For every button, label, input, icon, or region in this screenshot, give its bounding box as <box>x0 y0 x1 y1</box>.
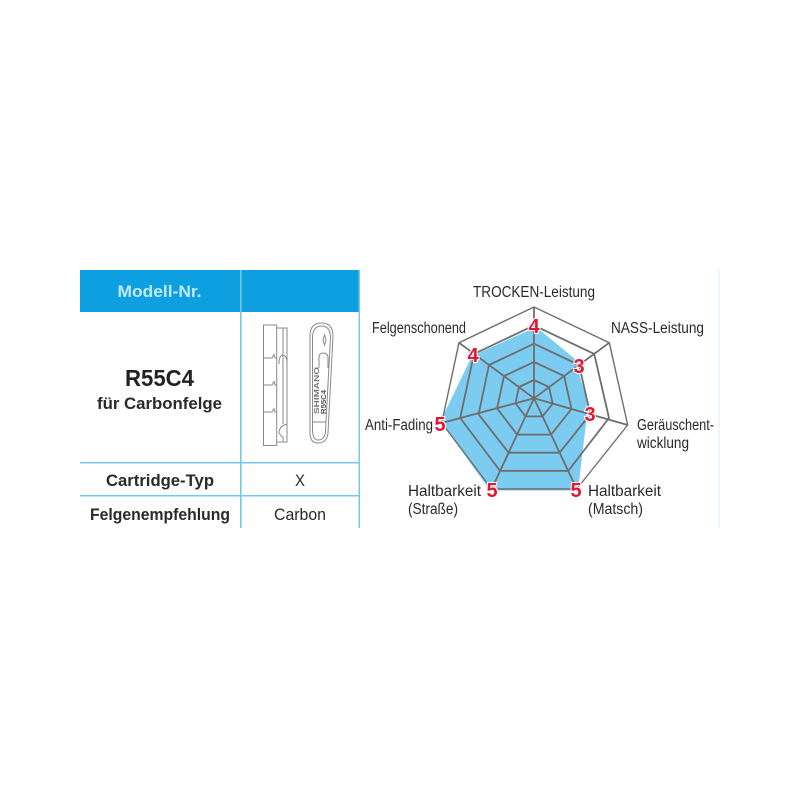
model name: R55C4 <box>125 365 194 391</box>
score: durability mud: 5 <box>570 480 582 502</box>
row value: rim recommendation: Carbon <box>274 505 326 524</box>
icon: brake pad side view <box>264 325 287 446</box>
label: durability road <box>408 483 482 518</box>
row label: rim recommendation: Felgenempfehlung <box>90 505 230 524</box>
label: durability mud: (Matsch) <box>588 501 643 518</box>
score: durability road: 5 <box>486 480 498 502</box>
row label: cartridge type: Cartridge-Typ <box>106 471 214 490</box>
label: durability road: Haltbarkeit <box>408 483 482 500</box>
label: anti-fading: Anti-Fading <box>365 417 433 434</box>
icon text: brand: SHIMANO <box>314 366 321 414</box>
label: noise: wicklung <box>636 435 689 452</box>
label: noise <box>636 417 714 452</box>
label: durability road: (Straße) <box>408 501 458 518</box>
label: wet performance: NASS-Leistung <box>611 320 704 337</box>
icon: brake pad top view <box>310 323 333 443</box>
score: noise: 3 <box>584 404 596 426</box>
score: anti-fading: 5 <box>434 414 446 436</box>
label: rim friendly: Felgenschonend <box>372 320 466 337</box>
row value: cartridge type: X <box>295 471 305 490</box>
model subtitle: für Carbonfelge <box>97 394 222 413</box>
label: durability mud: Haltbarkeit <box>588 483 662 500</box>
radar chart <box>365 284 714 518</box>
label: dry performance: TROCKEN-Leistung <box>473 284 595 301</box>
score: wet performance: 3 <box>573 356 585 378</box>
label: durability mud <box>588 483 662 518</box>
web grid <box>442 307 628 489</box>
score: rim friendly: 4 <box>467 345 479 367</box>
spec table <box>80 270 720 528</box>
table header band: Modell-Nr. <box>118 282 202 301</box>
filled score area <box>442 328 587 490</box>
score: dry performance: 4 <box>528 316 540 338</box>
table header band <box>80 270 359 312</box>
icon text: model: R55C4 <box>321 390 328 414</box>
label: noise: Geräuschent- <box>637 417 714 434</box>
